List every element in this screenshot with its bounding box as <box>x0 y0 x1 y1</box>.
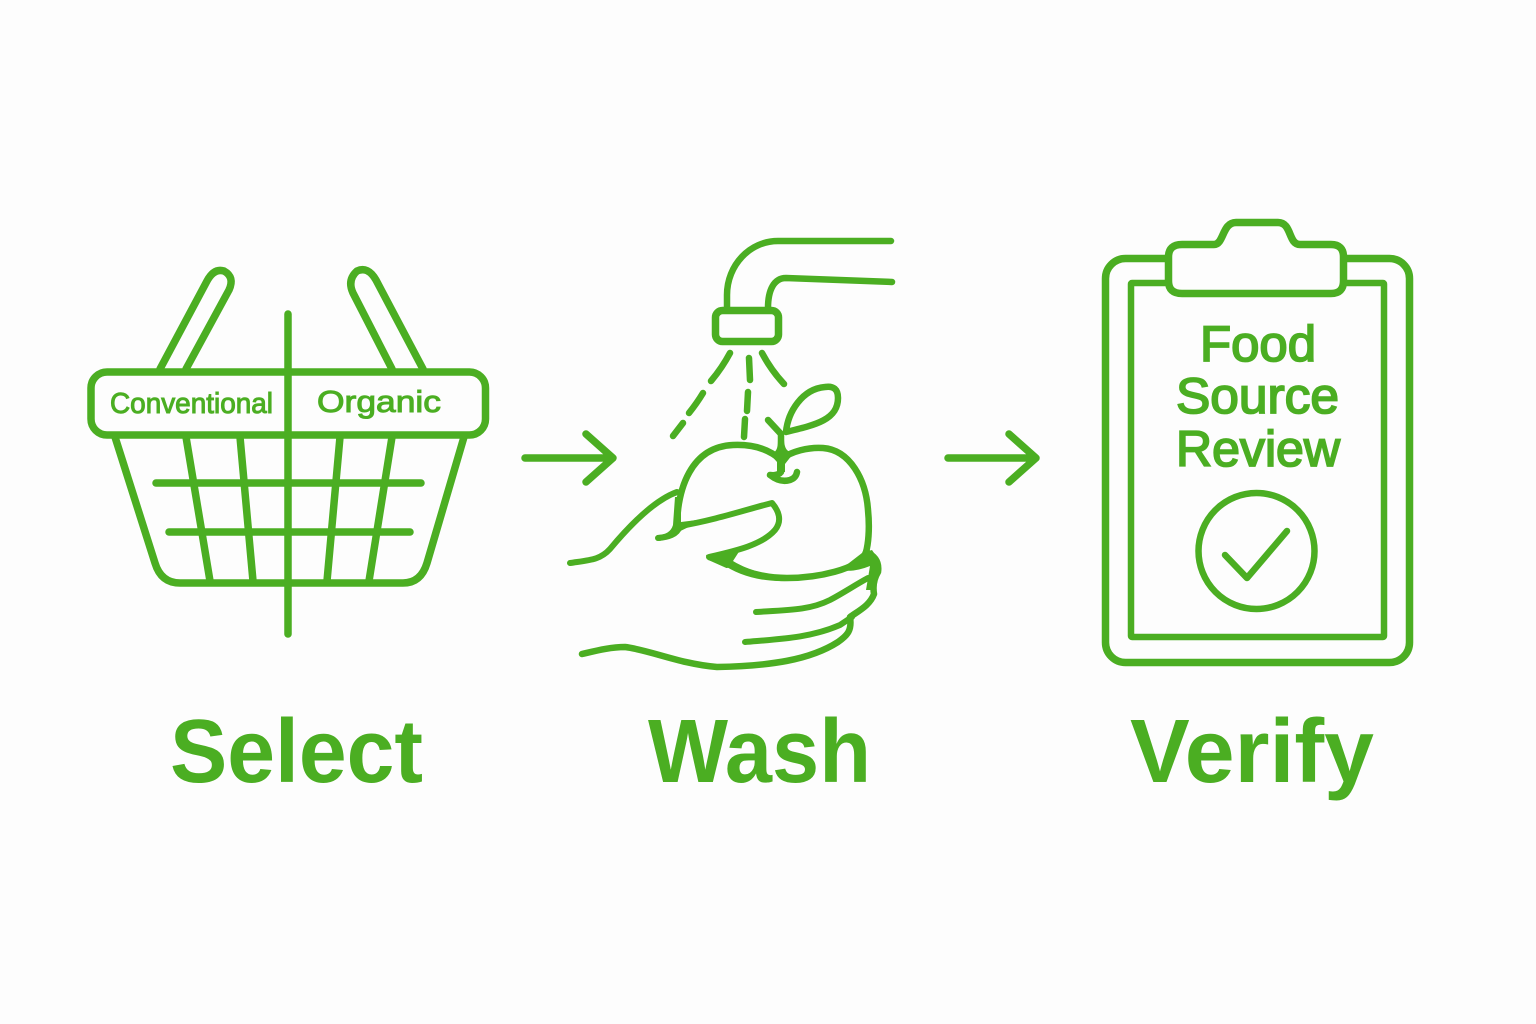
clipboard board <box>1106 258 1410 662</box>
clipboard clip <box>1168 222 1344 294</box>
clipboard text: Review <box>1176 421 1341 477</box>
arrow: wash to verify <box>948 434 1036 482</box>
icon: shopping basket with Conventional and Organic sides <box>91 270 486 634</box>
basket rim <box>91 372 486 435</box>
faucet <box>716 241 892 342</box>
label: Conventional: Conventional <box>110 388 273 420</box>
icon: clipboard with food source review <box>1106 222 1410 662</box>
hand <box>570 492 880 667</box>
check mark in circle <box>1198 493 1314 609</box>
water streams <box>673 353 784 437</box>
clipboard text <box>1176 316 1341 477</box>
clipboard text: Food <box>1200 316 1316 372</box>
heading: Wash: Wash <box>648 702 871 802</box>
clipboard paper <box>1131 283 1384 637</box>
icon: hands washing an apple under a faucet <box>570 241 892 667</box>
label: Organic: Organic <box>317 384 441 419</box>
arrow: select to wash <box>525 434 613 482</box>
apple with stem and leaf <box>677 387 869 578</box>
basket centre divider <box>284 314 292 634</box>
heading: Verify: Verify <box>1130 702 1374 802</box>
clipboard text: Source <box>1176 368 1339 424</box>
basket body and grid <box>115 437 464 583</box>
heading: Select: Select <box>170 702 423 802</box>
basket handles <box>160 270 423 369</box>
